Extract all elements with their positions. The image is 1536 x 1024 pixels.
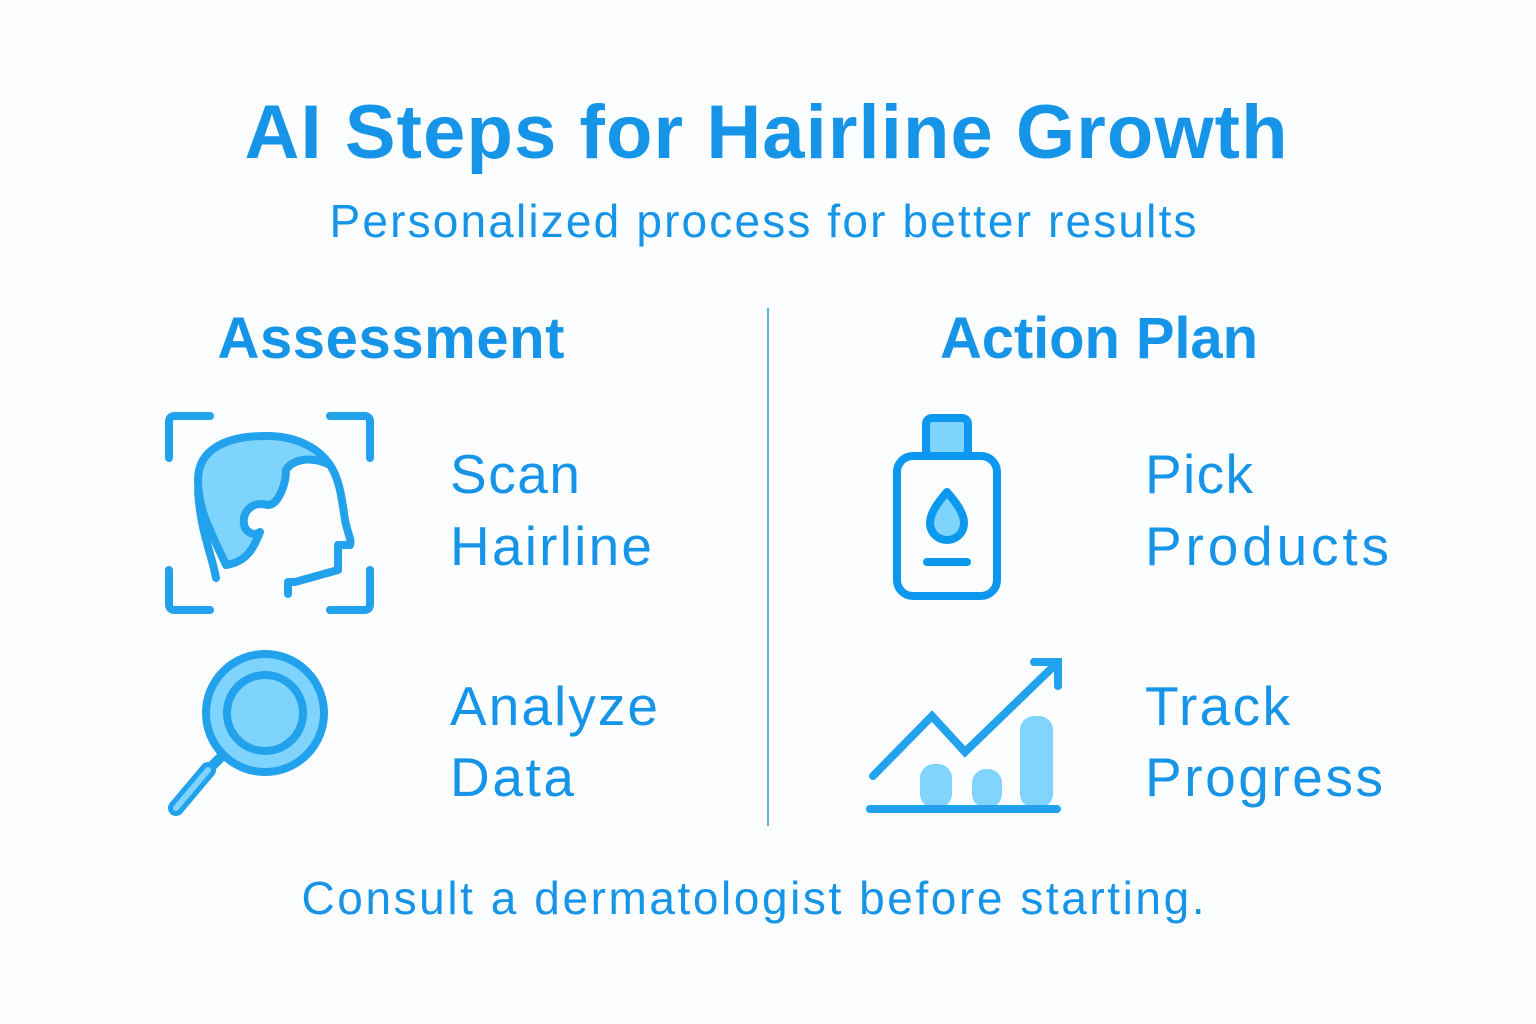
label: Scan Hairline: Scan: [450, 443, 580, 505]
label: Track Progress: Track: [1145, 675, 1290, 737]
label: Pick Products: Pick: [1145, 443, 1254, 505]
icon: bottle: [897, 418, 997, 596]
icon: growth chart: [870, 662, 1058, 809]
label: Pick Products: Products: [1145, 515, 1389, 577]
label: Analyze Data: Data: [450, 746, 574, 808]
title: AI Steps for Hairline Growth: [244, 90, 1288, 175]
label: Scan Hairline: Hairline: [450, 515, 652, 577]
heading: Assessment: Assessment: [218, 306, 564, 371]
icon: head scan: [169, 416, 370, 610]
subtitle: Personalized process for better results: [330, 195, 1196, 247]
footer note: Consult a dermatologist before starting.: [302, 872, 1204, 924]
icon: magnifier: [176, 654, 324, 808]
label: Track Progress: Progress: [1145, 746, 1383, 808]
label: Analyze Data: Analyze: [450, 675, 658, 737]
heading: Action Plan: Action Plan: [940, 306, 1258, 371]
